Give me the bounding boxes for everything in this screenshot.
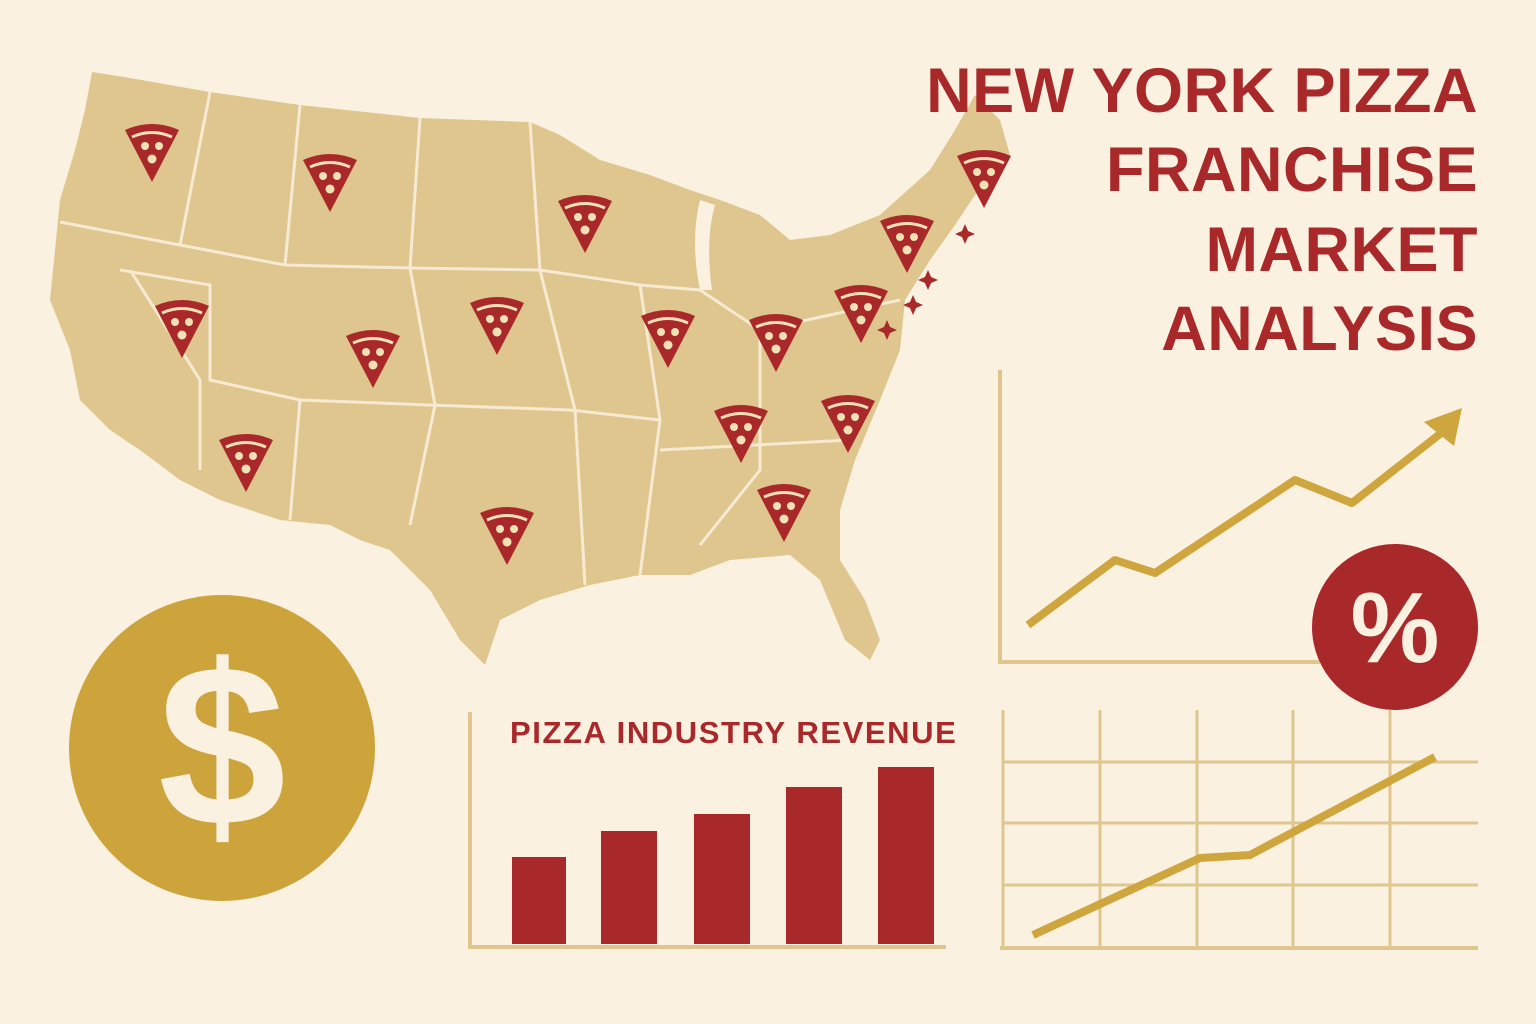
title [926,56,1478,364]
icon: percent circle: % [1351,572,1439,684]
title: MARKET [1206,215,1478,285]
title: NEW YORK PIZZA [926,56,1478,126]
icon: percent circle [1312,544,1478,710]
bar chart: pizza industry revenue: PIZZA INDUSTRY REVENUE [510,715,957,750]
bar chart: pizza industry revenue [470,712,957,947]
grid line chart [1000,710,1478,950]
map: USA with pizza markers [50,72,1011,665]
title: ANALYSIS [1161,294,1478,364]
icon: dollar coin: $ [158,617,286,874]
icon: dollar coin [69,595,375,901]
line chart: rising trend with arrow [1000,370,1462,662]
title: FRANCHISE [1106,135,1478,205]
